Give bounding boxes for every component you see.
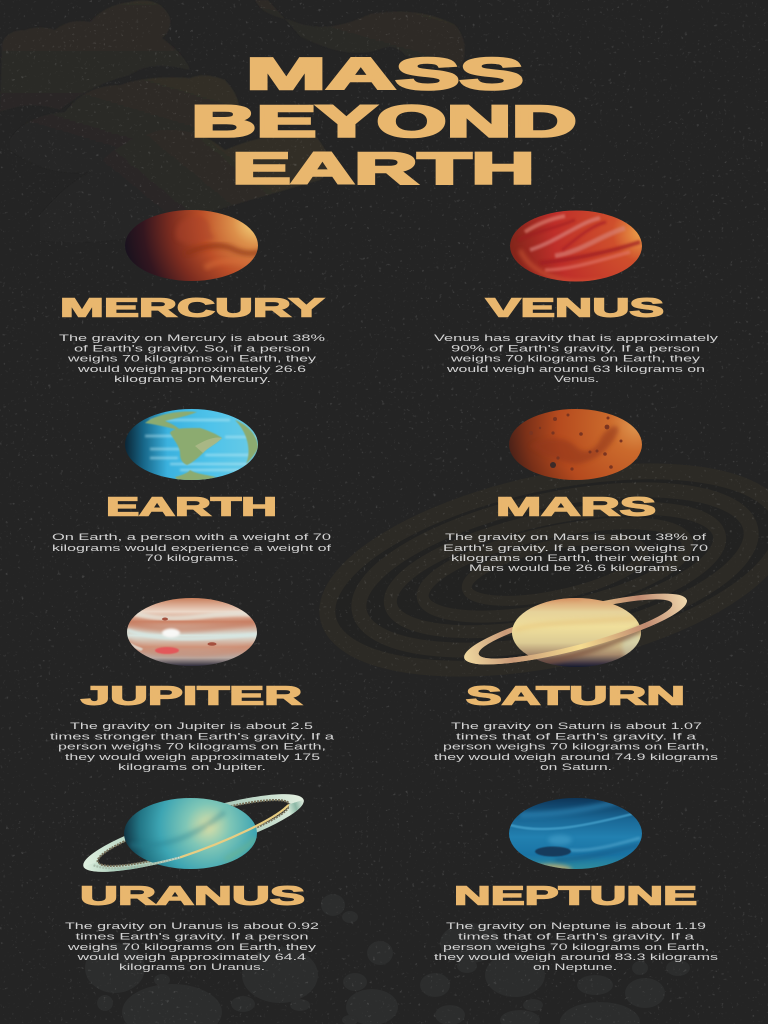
text: Venus gravity: would weigh around 63 kilograms on xyxy=(445,364,705,374)
panel: Earth xyxy=(52,409,332,563)
text: Venus gravity: weighs 70 kilograms on Earth, they xyxy=(449,354,701,364)
text: Uranus gravity xyxy=(65,921,319,972)
text: Jupiter gravity: person weighs 70 kilograms on Earth, xyxy=(58,742,326,752)
text: Neptune gravity: on Neptune. xyxy=(533,962,617,972)
text: Jupiter gravity: The gravity on Jupiter is about 2.5 xyxy=(70,721,313,731)
background rings xyxy=(310,436,768,704)
panel: Saturn xyxy=(434,580,719,772)
text: Earth gravity: 70 kilograms. xyxy=(145,553,238,563)
title: BEYOND xyxy=(191,97,577,146)
heading: Uranus: URANUS xyxy=(80,882,305,910)
text: Jupiter gravity xyxy=(50,721,335,772)
text: Uranus gravity: The gravity on Uranus is about 0.92 xyxy=(65,921,319,931)
text: Mars gravity: Mars would be 26.6 kilograms. xyxy=(469,563,682,573)
text: Venus gravity: Venus. xyxy=(554,374,599,384)
text: Mercury gravity: would weigh approximately 26.6 xyxy=(76,364,306,374)
text: Earth gravity xyxy=(52,532,332,563)
background asteroids xyxy=(85,894,690,1024)
heading: Venus: VENUS xyxy=(486,294,664,322)
text: Neptune gravity: The gravity on Neptune is about 1.19 xyxy=(446,921,706,931)
heading: Mars: MARS xyxy=(496,493,656,521)
text: Mercury gravity: The gravity on Mercury is about 38% xyxy=(59,333,325,343)
heading: Jupiter: JUPITER xyxy=(81,682,302,710)
icon: planet Jupiter xyxy=(125,598,258,666)
icon: planet Mercury xyxy=(125,210,262,281)
heading: Neptune: NEPTUNE xyxy=(454,882,697,910)
panel: Mars xyxy=(443,409,708,573)
text: Saturn gravity xyxy=(434,721,719,772)
text: Saturn gravity: times that of Earth's gravity. If a xyxy=(456,732,698,742)
heading: Earth: EARTH xyxy=(106,493,277,521)
background clouds xyxy=(0,0,465,242)
text: Venus gravity: 90% of Earth's gravity. If a person xyxy=(451,344,700,354)
icon: planet Uranus with ring xyxy=(83,794,304,872)
text: Earth gravity: On Earth, a person with a weight of 70 xyxy=(52,532,331,542)
text: Uranus gravity: would weigh approximately 64.4 xyxy=(76,952,306,962)
panel: Jupiter xyxy=(50,598,335,772)
text: Mars gravity: Earth's gravity. If a person weighs 70 xyxy=(443,543,708,553)
text: Uranus gravity: kilograms on Uranus. xyxy=(119,962,265,972)
text: Mercury gravity: of Earth's gravity. So, if a person xyxy=(74,344,310,354)
icon: planet Venus xyxy=(510,210,642,282)
text: Jupiter gravity: they would weigh approximately 175 xyxy=(65,752,320,762)
text: Earth gravity: kilograms would experience a weight of xyxy=(52,543,332,553)
text: Saturn gravity: on Saturn. xyxy=(540,762,612,772)
text: Neptune gravity xyxy=(434,921,719,972)
icon: planet Mars xyxy=(509,409,642,480)
panel: Venus xyxy=(434,210,719,384)
text: Uranus gravity: weighs 70 kilograms on Earth, they xyxy=(66,942,317,952)
title: EARTH xyxy=(232,144,535,193)
text: Mercury gravity xyxy=(59,333,325,384)
text: Mercury gravity: weighs 70 kilograms on Earth, they xyxy=(66,354,317,364)
text: Venus gravity xyxy=(434,333,719,384)
text: Neptune gravity: times that of Earth's gravity. If a xyxy=(458,932,695,942)
title xyxy=(191,50,577,193)
icon: planet Earth xyxy=(125,409,258,484)
text: Mars gravity xyxy=(443,532,708,573)
heading: Mercury: MERCURY xyxy=(60,294,324,322)
text: Mercury gravity: kilograms on Mercury. xyxy=(114,374,271,384)
text: Uranus gravity: times Earth's gravity. If a person xyxy=(76,932,308,942)
text: Venus gravity: Venus has gravity that is approximately xyxy=(434,333,719,343)
panel: Uranus xyxy=(65,780,319,972)
text: Mars gravity: kilograms on Earth, their weight on xyxy=(451,553,700,563)
text: Neptune gravity: they would weigh around 83.3 kilograms xyxy=(434,952,719,962)
text: Saturn gravity: The gravity on Saturn is about 1.07 xyxy=(451,721,702,731)
text: Jupiter gravity: times stronger than Earth's gravity. If a xyxy=(50,732,335,742)
text: Neptune gravity: person weighs 70 kilograms on Earth, xyxy=(443,942,709,952)
panel: Mercury xyxy=(59,210,325,384)
text: Saturn gravity: person weighs 70 kilograms on Earth, xyxy=(443,742,709,752)
icon: planet Saturn with ring xyxy=(464,594,687,667)
text: Mars gravity: The gravity on Mars is about 38% of xyxy=(445,532,707,542)
text: Saturn gravity: they would weigh around 74.9 kilograms xyxy=(434,752,719,762)
title: MASS xyxy=(246,50,524,99)
heading: Saturn: SATURN xyxy=(466,682,685,710)
panel: Neptune xyxy=(434,798,719,972)
icon: planet Neptune xyxy=(509,798,642,876)
text: Jupiter gravity: kilograms on Jupiter. xyxy=(118,762,266,772)
